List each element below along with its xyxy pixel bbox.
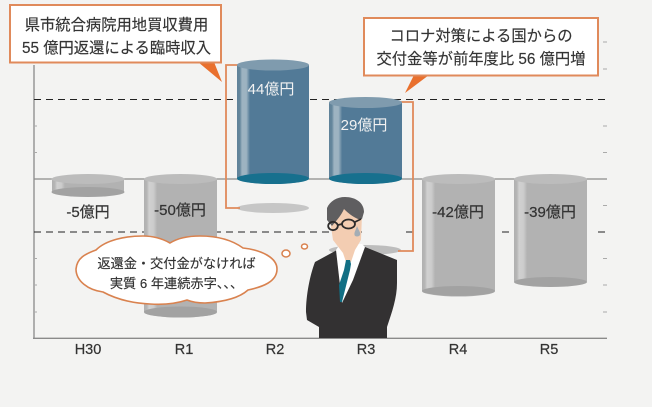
tie — [339, 260, 351, 302]
thought bubble — [76, 236, 277, 304]
callout: corona subsidies: 交付金等が前年度比 56 億円増 — [376, 50, 586, 68]
value labels — [66, 81, 576, 221]
chart axes and gridlines — [33, 42, 607, 339]
callout: corona subsidies — [364, 18, 598, 93]
thought dots — [282, 244, 308, 257]
x axis labels: R4 — [449, 342, 467, 358]
face and neck — [330, 205, 362, 262]
orange outline R2 — [226, 65, 240, 208]
bar: R3 29億円 — [329, 97, 402, 184]
callout: hospital land refund: 55 億円返還による臨時収入 — [22, 40, 211, 57]
sweat drop — [354, 226, 360, 236]
value labels: 29億円 — [341, 117, 387, 134]
glasses — [328, 219, 361, 230]
x axis labels — [75, 342, 558, 358]
suit — [306, 247, 397, 338]
value labels: -50億円 — [154, 202, 206, 219]
value labels: 44億円 — [248, 81, 294, 98]
x axis labels: R5 — [540, 342, 558, 358]
hair — [327, 197, 364, 226]
value labels: -39億円 — [524, 204, 576, 221]
callout: hospital land refund — [10, 5, 222, 82]
callout: corona subsidies: コロナ対策による国からの — [389, 28, 573, 45]
orange outline R3 — [398, 102, 413, 251]
x axis labels: H30 — [75, 342, 101, 358]
bar: R5 -39億円 — [514, 174, 587, 287]
bar: R2 shadow ellipse — [237, 203, 309, 213]
x axis labels: R2 — [266, 342, 284, 358]
x axis labels: R3 — [357, 342, 375, 358]
x axis labels: R1 — [175, 342, 193, 358]
callout: hospital land refund: 県市統合病院用地買収費用 — [25, 17, 208, 34]
bar: R3 shadow ellipse — [329, 245, 401, 255]
bar: R4 -42億円 — [422, 174, 495, 296]
thought bubble: 返還金・交付金がなければ — [97, 256, 256, 271]
shirt — [336, 244, 365, 303]
value labels: -42億円 — [432, 204, 484, 221]
value labels: -5億円 — [66, 204, 110, 221]
thought bubble: 実質 6 年連続赤字、、、 — [110, 276, 243, 291]
bar: R2 44億円 — [237, 60, 309, 184]
bar: R1 -50億円 — [144, 174, 217, 318]
person: worried man in suit — [306, 197, 397, 338]
bar: H30 -5億円 — [52, 174, 124, 197]
